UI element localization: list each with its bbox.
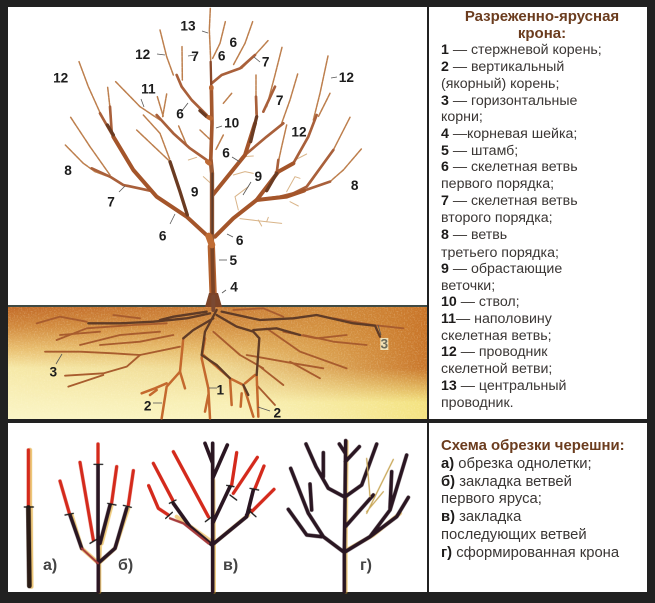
roots	[37, 297, 403, 418]
first-order branches	[113, 123, 304, 237]
central leader and trunk	[211, 247, 213, 300]
tree part numbers: 11	[141, 82, 156, 97]
panel: pruning diagrams	[8, 423, 427, 592]
legend text: 12 — проводник	[441, 344, 548, 360]
legend text: 6 — скелетная ветвь	[441, 159, 578, 175]
tree crown and trunk	[65, 8, 361, 300]
tree part numbers: 5	[230, 253, 238, 268]
pruning legend text: в) закладка	[441, 509, 522, 525]
tree part numbers: 7	[276, 93, 283, 108]
legend text: третьего порядка;	[441, 245, 559, 261]
leader lines	[56, 31, 381, 411]
tree part numbers: 8	[64, 163, 72, 178]
tree part numbers: 13	[180, 18, 196, 33]
stage letters	[43, 557, 372, 574]
legend text: 5 — штамб;	[441, 143, 518, 159]
tree part numbers: 4	[230, 279, 238, 294]
panel: pruning legend	[429, 423, 647, 592]
pruning legend text: последующих ветвей	[441, 527, 587, 543]
legend text: 7 — скелетная ветвь	[441, 193, 578, 209]
stage letters: в)	[223, 557, 238, 574]
legend text: 2 — вертикальный	[441, 59, 564, 75]
trunk to soil	[205, 293, 222, 307]
tree part numbers: 2	[274, 405, 282, 420]
tree part numbers: 9	[191, 184, 199, 199]
legend text: скелетная ветвь;	[441, 328, 552, 344]
stage v: following branches	[149, 443, 274, 592]
pruning legend heading: Схема обрезки черешни:	[441, 438, 625, 454]
tree part numbers: 6	[218, 49, 226, 64]
legend text: проводник.	[441, 395, 514, 411]
tree part numbers: 12	[53, 70, 69, 85]
tree part numbers: 8	[351, 178, 359, 193]
stage a: one-year whip	[24, 450, 33, 587]
tree part numbers: 7	[107, 195, 115, 210]
tree part numbers: 7	[262, 55, 269, 70]
pale fruiting twigs	[188, 154, 307, 226]
tree part numbers: 12	[135, 47, 151, 62]
panel: tree diagram	[8, 7, 427, 420]
legend text: 13 — центральный	[441, 378, 566, 394]
pruning legend text: г) сформированная крона	[441, 545, 620, 561]
legend heading: крона:	[518, 25, 566, 42]
stage b: first tier	[60, 444, 133, 592]
tree part numbers: 7	[191, 49, 199, 64]
legend text: корни;	[441, 109, 483, 125]
tree part numbers: 12	[339, 70, 354, 85]
legend text: 9 — обрастающие	[441, 261, 562, 277]
tree part numbers: 6	[176, 107, 184, 122]
tree part numbers: 12	[291, 124, 307, 139]
legend heading: Разреженно-ярусная	[465, 8, 619, 25]
stage letters: б)	[118, 557, 133, 574]
tree part numbers	[50, 18, 389, 420]
tree part numbers: 1	[217, 382, 225, 397]
tree part numbers: 9	[255, 169, 263, 184]
tree part numbers: 3	[381, 337, 389, 352]
legend text: 8 — ветвь	[441, 227, 507, 243]
tree part numbers: 6	[159, 228, 167, 243]
stage letters: а)	[43, 557, 57, 574]
fine outer shoots	[65, 8, 361, 192]
legend text: (якорный) корень;	[441, 76, 559, 92]
legend text: 10 — ствол;	[441, 294, 520, 310]
legend text: 1 — стержневой корень;	[441, 42, 602, 58]
tree part numbers: 6	[230, 35, 238, 50]
legend text: 3 — горизонтальные	[441, 93, 578, 109]
panel: tree legend	[429, 7, 647, 419]
tree part numbers: 6	[222, 145, 230, 160]
stage letters: г)	[360, 557, 372, 574]
legend text	[441, 42, 602, 411]
tree part numbers: 3	[50, 364, 58, 379]
second-order branches	[92, 55, 333, 199]
tree part numbers: 6	[236, 233, 244, 248]
legend text: первого порядка;	[441, 176, 554, 192]
tree part numbers: 2	[144, 399, 152, 414]
legend text: второго порядка;	[441, 210, 553, 226]
legend heading	[465, 8, 619, 42]
pruning legend text: первого яруса;	[441, 491, 542, 507]
stage g: formed crown	[288, 441, 408, 592]
pruning legend text: а) обрезка однолетки;	[441, 456, 592, 472]
legend text: скелетной ветви;	[441, 361, 552, 377]
pruning legend text: б) закладка ветвей	[441, 474, 572, 490]
legend text: 11— наполовину	[441, 311, 553, 327]
pruning legend text	[441, 456, 620, 561]
tree part numbers: 10	[224, 116, 240, 131]
soil	[8, 305, 427, 419]
legend text: 4 —корневая шейка;	[441, 126, 577, 142]
legend text: веточки;	[441, 278, 495, 294]
